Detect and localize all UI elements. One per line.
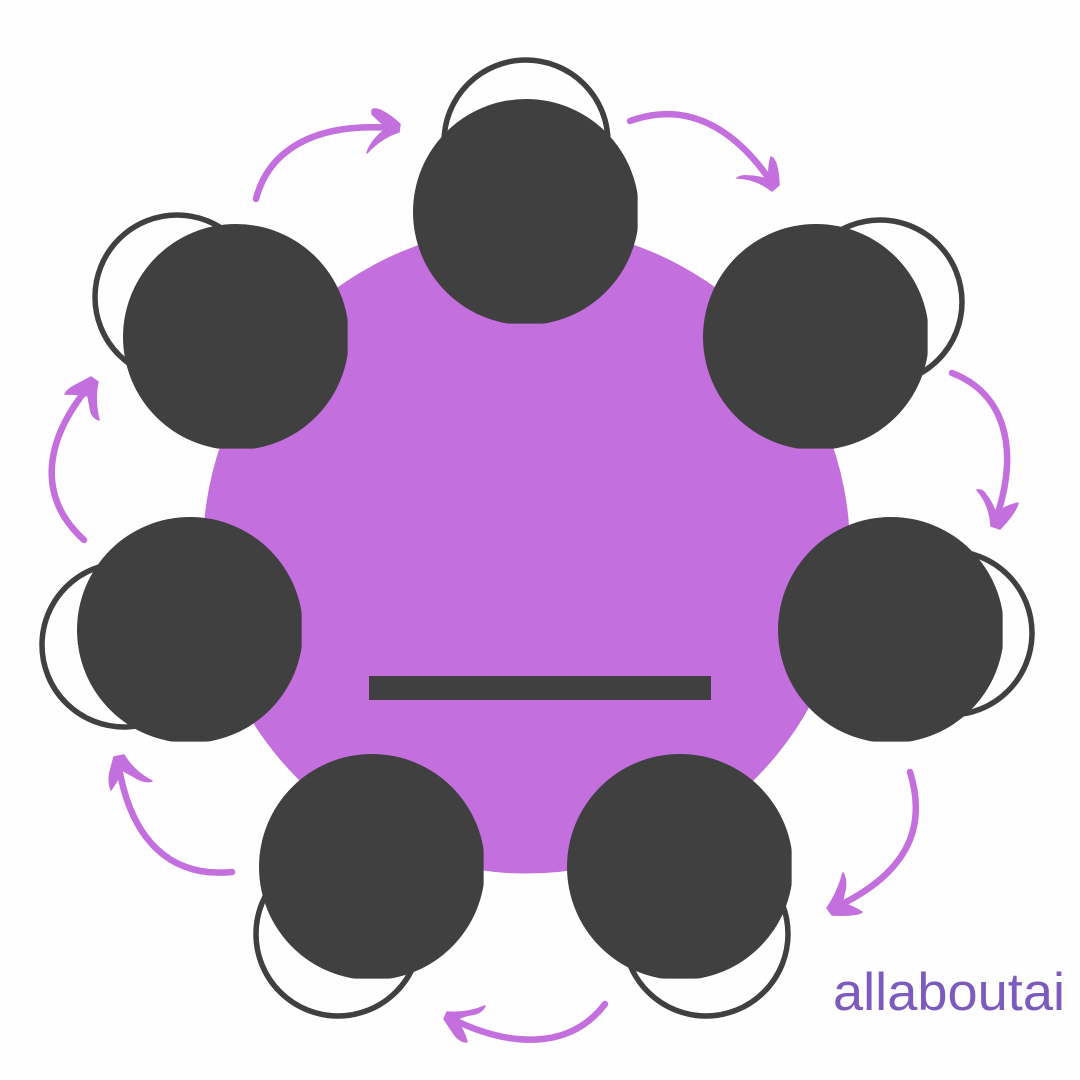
dark circle: lower left	[259, 754, 485, 980]
outline circle: lower right	[624, 852, 788, 1016]
arrow: lower right to bottom	[444, 1004, 605, 1042]
outline circle: right	[868, 551, 1032, 715]
central purple circle	[203, 226, 850, 874]
dark circle: lower right	[567, 754, 793, 980]
arrow: bottom to lower left	[109, 755, 232, 873]
arrow: left to upper left	[52, 377, 99, 540]
arrow: top to upper right	[630, 114, 779, 191]
dark circle: upper right	[703, 224, 929, 450]
dark circle: left	[77, 517, 303, 743]
outline circle: lower left	[256, 852, 420, 1016]
logo: allaboutai: allaboutai	[833, 963, 1065, 1022]
label bar	[369, 676, 711, 700]
outline circle: left	[42, 563, 206, 727]
dark circle: top	[413, 99, 639, 325]
outline circle: upper left	[95, 215, 259, 379]
arrow: right to lower right	[827, 772, 916, 915]
outline circle: top	[444, 60, 608, 224]
dark circle: right	[778, 517, 1004, 743]
outline circle: upper right	[798, 220, 962, 384]
dark circle: upper left	[123, 224, 349, 450]
arrow: upper left to top	[256, 109, 400, 199]
arrow: upper right to right	[952, 373, 1018, 529]
